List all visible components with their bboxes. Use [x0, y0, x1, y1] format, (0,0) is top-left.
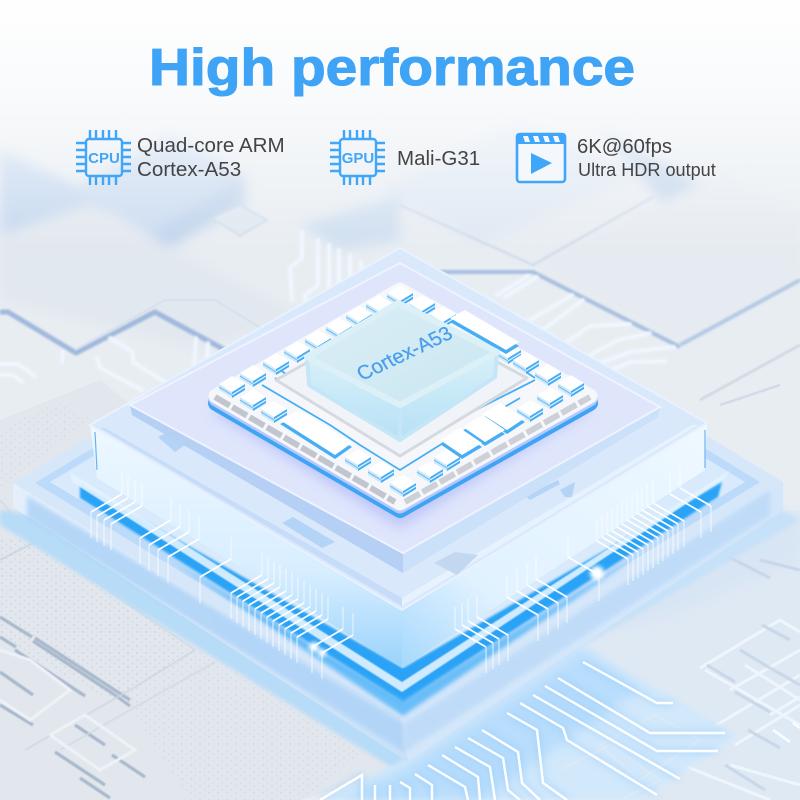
long pads [280, 310, 525, 459]
CPU label [137, 134, 285, 181]
lower board with dotted texture [0, 380, 400, 800]
icon: video player [516, 133, 566, 182]
glowing circuit board, bottom centre [320, 645, 738, 800]
bright blue channel [70, 470, 730, 716]
soft raised blocks behind the title [0, 120, 800, 350]
glowing traces [320, 662, 725, 800]
video label: 6K@60fps [577, 136, 672, 158]
blue floor glow beneath the chip [0, 510, 800, 785]
lower left circuit blocks [0, 500, 215, 798]
chip shadow glow [212, 300, 590, 528]
lower right pale blue board [560, 510, 800, 800]
chip rim [216, 294, 590, 510]
icon: GPU: GPU [342, 150, 374, 167]
fine traces on left of glass [91, 472, 353, 679]
upper circuit traces [0, 232, 674, 390]
pale tile near the top [212, 205, 267, 236]
glass layer [90, 248, 707, 668]
CPU label: Cortex-A53 [137, 158, 241, 181]
lavender plate [130, 263, 660, 573]
title: High performance [149, 39, 635, 97]
chip substrate: base layer [13, 250, 783, 762]
video label [577, 136, 716, 180]
icon: CPU: CPU [88, 150, 120, 167]
fine traces on right of glass [309, 466, 711, 673]
cube label: Cortex-A53 [353, 323, 457, 385]
glass markings [158, 431, 575, 575]
processor chip [212, 285, 590, 528]
grey edge blocks [215, 397, 395, 502]
CPU label: Quad-core ARM [137, 134, 285, 157]
upper board edges [0, 197, 800, 405]
chip top face [216, 290, 590, 503]
inner socket [276, 310, 527, 456]
GPU label: Mali-G31 [397, 147, 480, 170]
blue interconnects [262, 368, 535, 470]
outer pads [219, 285, 584, 497]
video label: Ultra HDR output [578, 160, 716, 180]
icon: CPU [76, 130, 131, 185]
icon: GPU [330, 130, 385, 185]
top cube [307, 303, 497, 440]
